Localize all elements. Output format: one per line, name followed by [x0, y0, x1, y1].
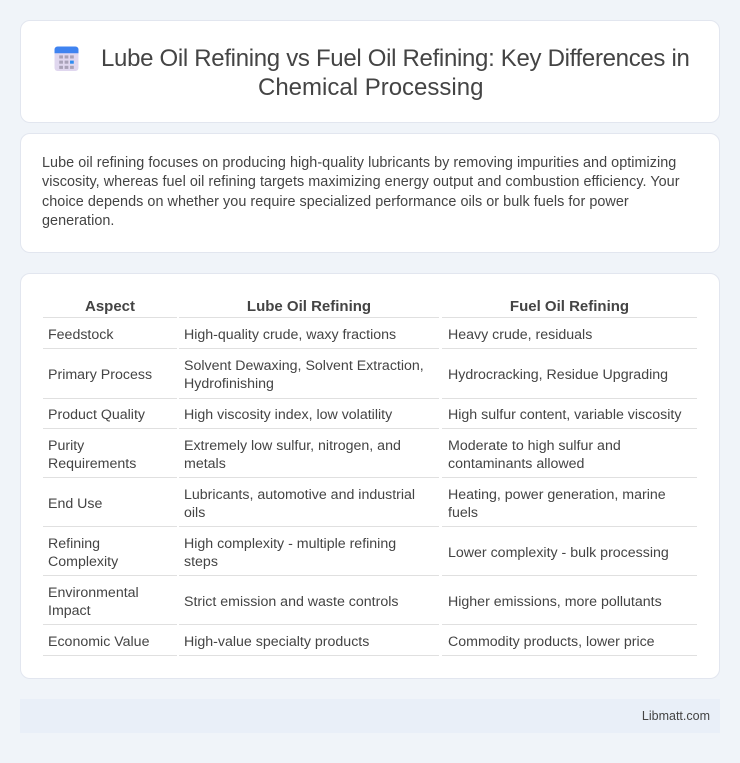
row: Purity Requirements: contaminants allowed: [448, 456, 584, 472]
row: Economic Value: [43, 624, 697, 656]
row: Environmental Impact: Impact: [48, 603, 91, 619]
table header: Aspect: [85, 298, 135, 315]
row: Purity Requirements: metals: [184, 456, 226, 472]
row: End Use: Heating, power generation, marine: [448, 487, 666, 503]
row: Primary Process: Solvent Dewaxing, Solvent Extraction,: [184, 358, 424, 374]
footer source: Libmatt.com: [642, 709, 710, 723]
row: Product Quality: [43, 398, 697, 423]
row: Primary Process: [43, 348, 697, 392]
row: End Use: oils: [184, 505, 205, 521]
row: Purity Requirements: Extremely low sulfur, nitrogen, and: [184, 438, 401, 454]
row: End Use: End Use: [48, 496, 102, 512]
row: Purity Requirements: [43, 428, 697, 472]
title: Lube Oil Refining vs Fuel Oil Refining: Key Differences in: [101, 45, 690, 72]
row: Primary Process: Hydrocracking, Residue Upgrading: [448, 367, 668, 383]
row: Environmental Impact: Environmental: [48, 585, 139, 601]
row: Refining Complexity: steps: [184, 554, 218, 570]
intro text: viscosity, whereas fuel oil refining targets maximizing energy output and combustion efficiency. Your: [42, 174, 680, 190]
row: End Use: Lubricants, automotive and industrial: [184, 487, 415, 503]
row: Product Quality: Product Quality: [48, 407, 145, 423]
panel: title card: [20, 20, 720, 123]
row: Refining Complexity: Refining: [48, 536, 100, 552]
row: Environmental Impact: Higher emissions, more pollutants: [448, 594, 662, 610]
row: Environmental Impact: [43, 575, 697, 619]
row: Primary Process: Hydrofinishing: [184, 376, 274, 392]
intro text: Lube oil refining focuses on producing high-quality lubricants by removing impurities and optimizing: [42, 155, 676, 171]
title: Chemical Processing: [258, 74, 483, 101]
panel: introduction: [20, 133, 720, 253]
row: Environmental Impact: Strict emission and waste controls: [184, 594, 398, 610]
row: Refining Complexity: Lower complexity - bulk processing: [448, 545, 669, 561]
intro text: [42, 155, 680, 229]
icon: calendar: [54, 46, 78, 71]
row: Refining Complexity: Complexity: [48, 554, 118, 570]
footer bar: [20, 699, 720, 733]
row: End Use: [43, 477, 697, 521]
row: Refining Complexity: [43, 526, 697, 570]
row: End Use: fuels: [448, 505, 478, 521]
row: Primary Process: Primary Process: [48, 367, 152, 383]
row: Economic Value: Economic Value: [48, 634, 149, 650]
row: Product Quality: High viscosity index, low volatility: [184, 407, 392, 423]
table header: Lube Oil Refining: [247, 298, 371, 315]
row: Feedstock: Heavy crude, residuals: [448, 327, 592, 343]
intro text: generation.: [42, 213, 114, 229]
row: Economic Value: Commodity products, lower price: [448, 634, 655, 650]
row: Purity Requirements: Moderate to high sulfur and: [448, 438, 621, 454]
intro text: choice depends on whether you require specialized performance oils or bulk fuels for power: [42, 194, 629, 210]
row: Purity Requirements: Purity: [48, 438, 84, 454]
title: [101, 45, 690, 101]
panel: comparison table: [20, 273, 720, 679]
row: Purity Requirements: Requirements: [48, 456, 136, 472]
table header: [85, 298, 629, 315]
row: Economic Value: High-value specialty products: [184, 634, 369, 650]
row: Product Quality: High sulfur content, variable viscosity: [448, 407, 681, 423]
row: Feedstock: [43, 317, 697, 343]
row: Refining Complexity: High complexity - multiple refining: [184, 536, 396, 552]
row: Feedstock: Feedstock: [48, 327, 113, 343]
table header: Fuel Oil Refining: [510, 298, 629, 315]
row: Feedstock: High-quality crude, waxy fractions: [184, 327, 396, 343]
